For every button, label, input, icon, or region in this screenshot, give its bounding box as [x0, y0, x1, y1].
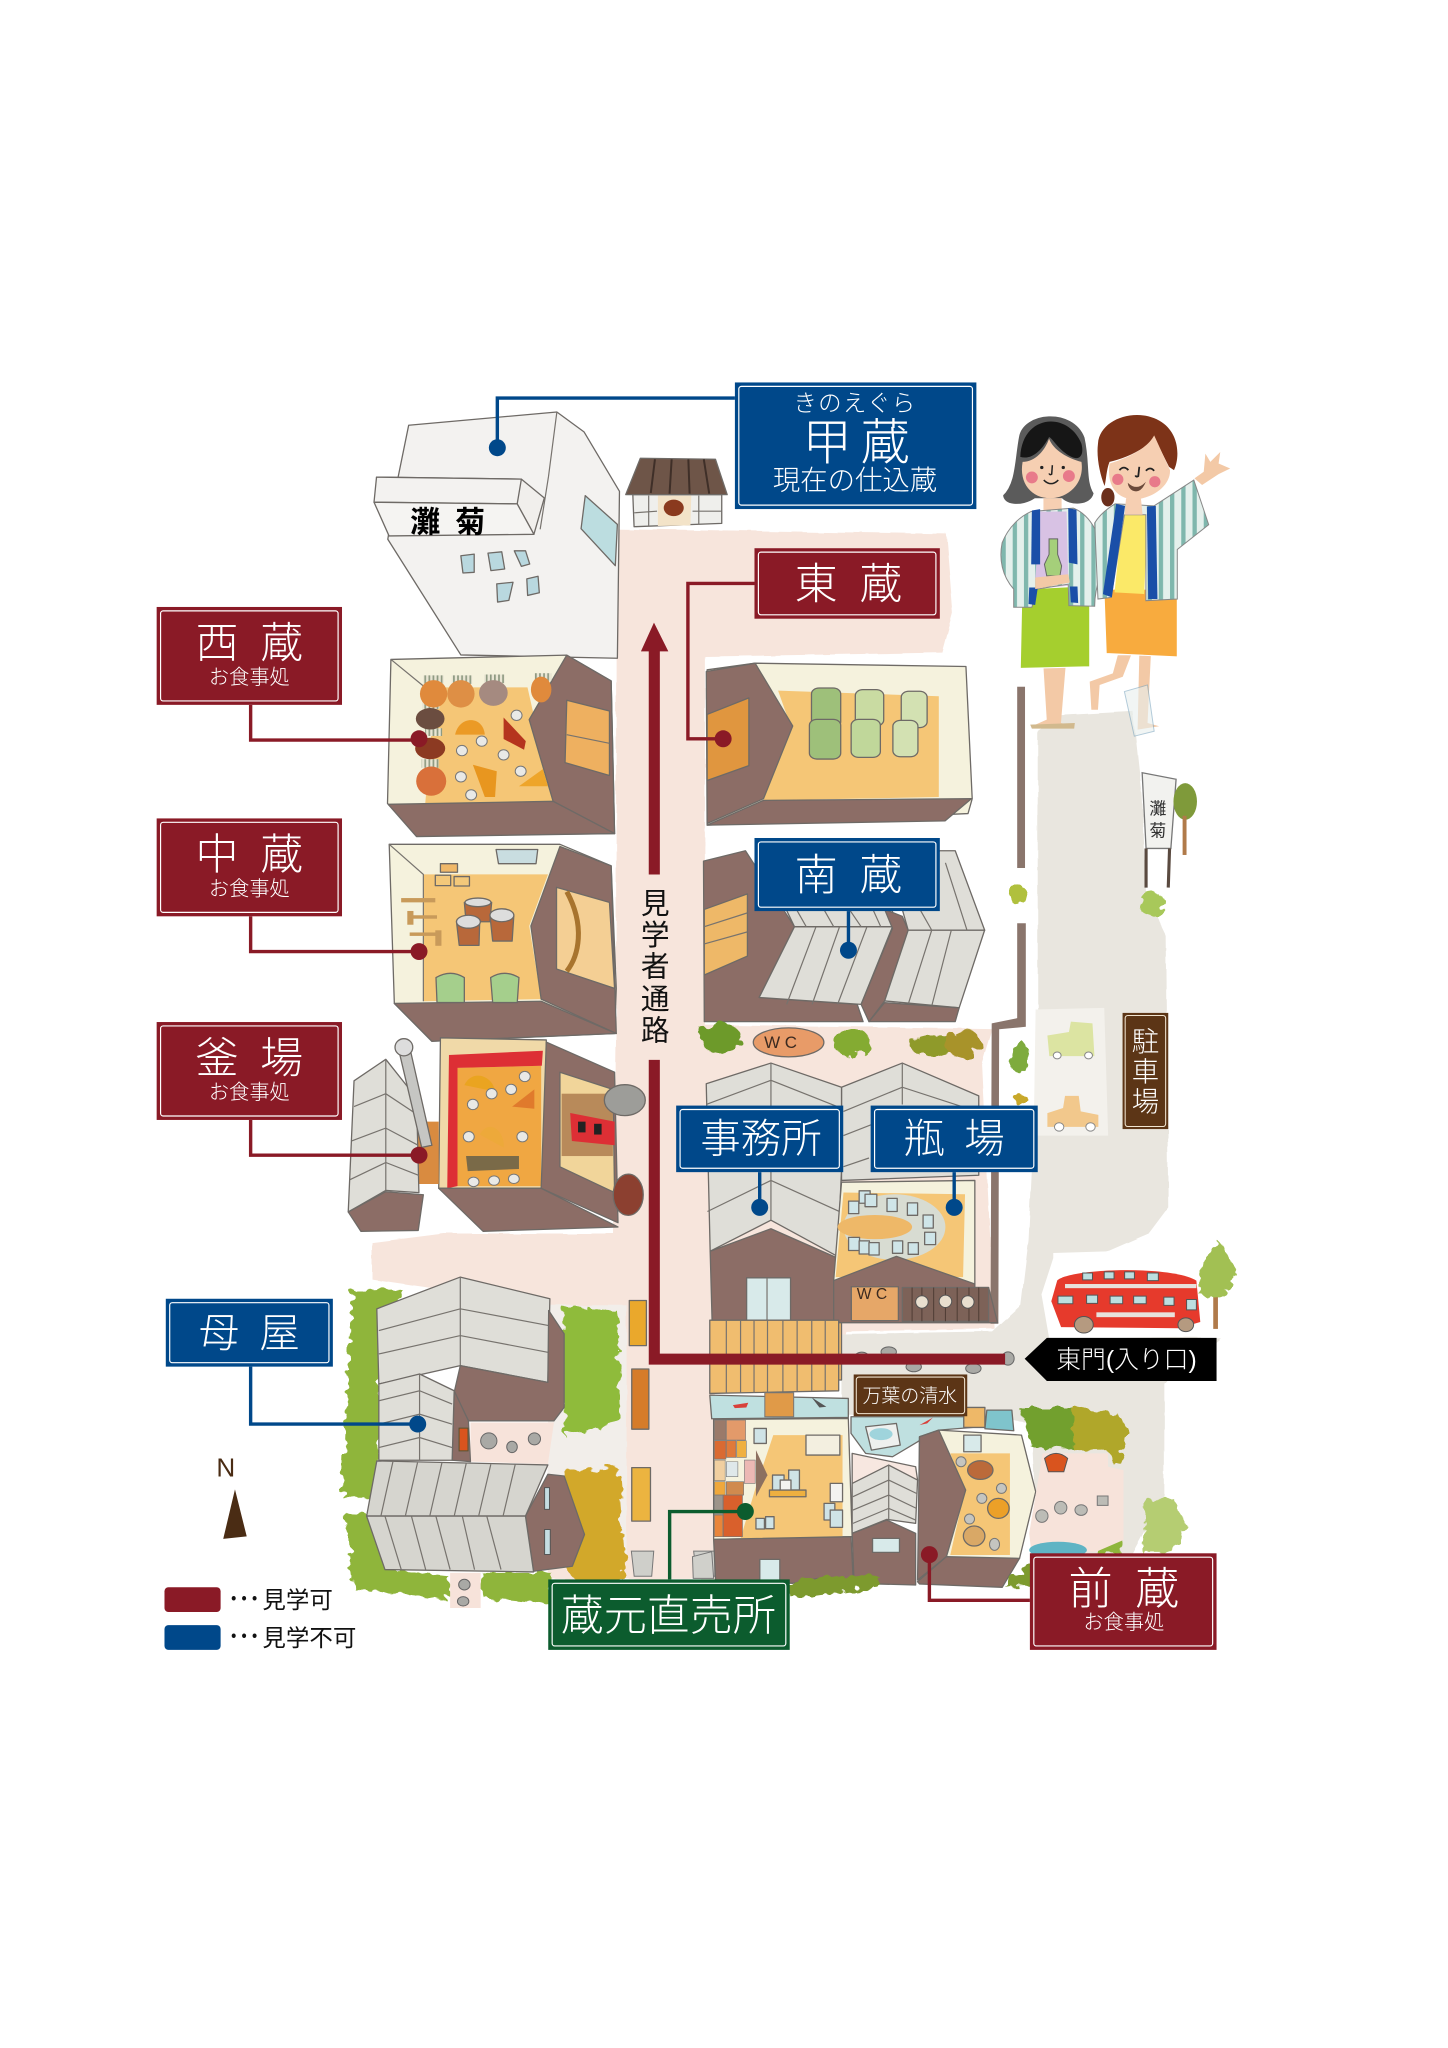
west storehouse interior — [387, 655, 615, 837]
small shrine — [626, 458, 727, 527]
label: Main house — [166, 1299, 333, 1367]
label: Office: 事務所 — [700, 1116, 822, 1162]
label: Kinoe-gura: きのえぐら — [793, 390, 917, 416]
compass north marker: N — [216, 1452, 235, 1482]
south storehouse roofs — [703, 851, 985, 1022]
legend: 見学不可 — [262, 1625, 356, 1651]
visitor path vertical label: 者 — [641, 951, 670, 983]
visitor route arrow — [641, 623, 1005, 1365]
label: Boiler room — [157, 1022, 342, 1120]
label: Kinoe-gura: 甲 蔵 — [803, 414, 910, 470]
map ground: visitor paths — [372, 529, 995, 1579]
label: East gate entrance — [1025, 1338, 1217, 1381]
legend — [164, 1586, 356, 1651]
middle storehouse interior — [389, 844, 616, 1041]
label: Bottling hall: 瓶 場 — [904, 1116, 1005, 1162]
label: East gate entrance: 東門(入り口) — [1056, 1347, 1197, 1374]
two mascot women in happi coats — [1001, 415, 1230, 736]
label: Manyo spring — [854, 1374, 967, 1416]
label: Manyo spring: 万葉の清水 — [863, 1385, 957, 1407]
label: Middle storehouse: お食事処 — [209, 877, 290, 900]
legend: ･･･ — [228, 1586, 260, 1612]
concrete road sign post — [1142, 773, 1197, 888]
perimeter brown wall — [991, 687, 1026, 1324]
east storehouse building — [706, 663, 972, 825]
compass north marker — [216, 1452, 247, 1539]
label: Boiler room: 釜 場 — [196, 1035, 303, 1083]
label: West storehouse: お食事処 — [209, 666, 290, 689]
main house Moya with gardens — [342, 1277, 715, 1608]
label: Kinoe-gura — [735, 382, 976, 509]
label: Direct sales shop — [548, 1579, 790, 1650]
WC sign text on bottling hall: W C — [857, 1286, 887, 1303]
office and bottling hall — [706, 1063, 998, 1380]
visitor path vertical label: 学 — [641, 920, 670, 952]
red double-decker bus and tree — [1041, 1241, 1237, 1339]
legend: 見学可 — [262, 1587, 333, 1613]
label: Bottling hall — [871, 1106, 1038, 1172]
label: Main house: 母 屋 — [199, 1310, 300, 1356]
parked cars — [1034, 1008, 1108, 1136]
label: West storehouse — [157, 607, 342, 705]
label: Middle storehouse: 中 蔵 — [196, 831, 303, 879]
visitor path vertical label: 通 — [641, 984, 670, 1016]
label: Direct sales shop: 蔵元直売所 — [561, 1592, 776, 1640]
visitor path vertical label — [641, 889, 670, 1047]
label: East storehouse: 東 蔵 — [795, 561, 902, 609]
label: Boiler room: お食事処 — [209, 1081, 290, 1104]
label: West storehouse: 西 蔵 — [196, 620, 303, 668]
leader lines and pins — [251, 398, 1030, 1600]
kinoe-gura: white brewery building — [374, 412, 619, 658]
visitor path vertical label: 路 — [641, 1015, 670, 1047]
sign on brewery: Nadagiku: 灘 菊 — [410, 507, 485, 540]
visitor path vertical label: 見 — [641, 889, 670, 921]
label: East storehouse — [754, 548, 940, 619]
label: Front storehouse: お食事処 — [1083, 1611, 1164, 1634]
concrete road sign post: 灘 — [1149, 800, 1166, 819]
label: South storehouse: 南 蔵 — [795, 852, 902, 900]
sales shop, Manyo spring and Mae-gura — [692, 1320, 1187, 1598]
garden shrubs and WC stone by south storehouse — [700, 885, 1165, 1105]
woman waving — [1090, 415, 1230, 736]
label: Office — [676, 1106, 843, 1172]
woman with bottle — [1001, 415, 1103, 729]
label: Front storehouse: 前 蔵 — [1068, 1565, 1179, 1614]
label: Kinoe-gura: 現在の仕込蔵 — [773, 464, 937, 495]
boiler room interior — [439, 1038, 645, 1231]
furnace shed and chimney — [348, 1039, 439, 1231]
label: Parking — [1123, 1013, 1168, 1129]
concrete road sign post: 菊 — [1149, 822, 1166, 841]
label: Parking: 場 — [1132, 1086, 1159, 1117]
label: Parking: 車 — [1132, 1056, 1159, 1087]
map ground: grey road and parking — [842, 711, 1220, 1566]
label: Front storehouse — [1030, 1553, 1217, 1650]
label: Parking: 駐 — [1132, 1026, 1159, 1057]
label: Middle storehouse — [157, 818, 342, 916]
legend: ･･･ — [228, 1624, 260, 1650]
garden shrubs and WC stone by south storehouse: W C — [764, 1033, 797, 1052]
label: South storehouse — [754, 838, 940, 911]
